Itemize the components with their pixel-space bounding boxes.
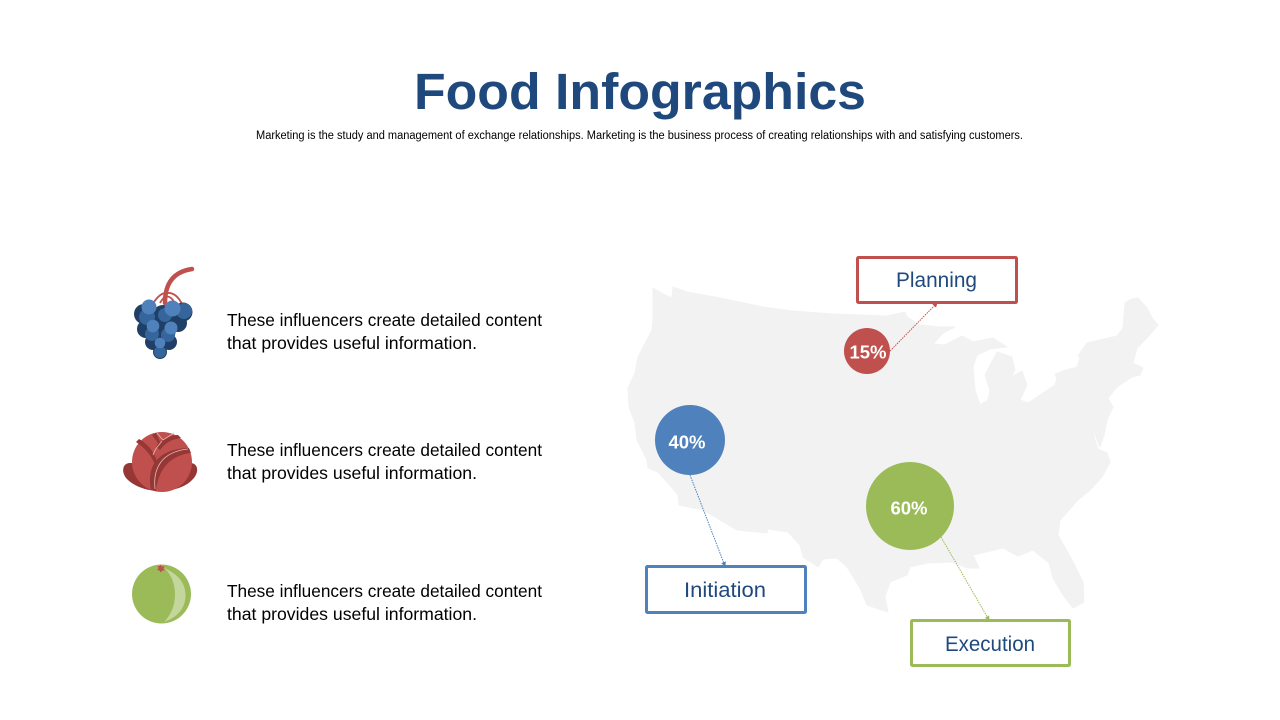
title: Food Infographics — [414, 63, 866, 120]
label box: Planning — [858, 258, 1016, 302]
marker: 15%: 15% — [849, 342, 887, 362]
text: third influencer description: These influencers create detailed content — [227, 581, 542, 601]
text: third influencer description: that provides useful information. — [227, 604, 477, 624]
map: United States — [628, 287, 1158, 612]
label box: Initiation — [646, 566, 806, 612]
marker: 15% — [844, 328, 890, 374]
text: third influencer description — [227, 581, 542, 624]
label box: Initiation: Initiation — [684, 579, 766, 602]
marker: 60%: 60% — [890, 498, 928, 518]
arrow: 60% to Execution — [941, 537, 989, 620]
text: second influencer description — [227, 440, 542, 483]
arrow: 40% to Initiation — [690, 475, 725, 566]
label box: Execution — [912, 620, 1070, 666]
subtitle: Marketing is the study and management of exchange relationships. Marketing is the business process of creating relationships with and satisfying customers. — [256, 130, 1023, 142]
text: second influencer description: that provides useful information. — [227, 463, 477, 483]
text: first influencer description: that provides useful information. — [227, 333, 477, 353]
text: second influencer description: These influencers create detailed content — [227, 440, 542, 460]
label box: Execution: Execution — [945, 633, 1035, 656]
marker: 60% — [866, 462, 954, 550]
label box: Planning: Planning — [896, 269, 977, 292]
marker: 40% — [655, 405, 725, 475]
icon: melon — [132, 564, 191, 624]
arrow: 15% to Planning — [890, 303, 937, 351]
text: first influencer description — [227, 310, 542, 353]
text: first influencer description: These influencers create detailed content — [227, 310, 542, 330]
marker: 40%: 40% — [668, 432, 706, 452]
icon: grapes — [134, 269, 192, 359]
icon: cabbage — [123, 432, 197, 492]
